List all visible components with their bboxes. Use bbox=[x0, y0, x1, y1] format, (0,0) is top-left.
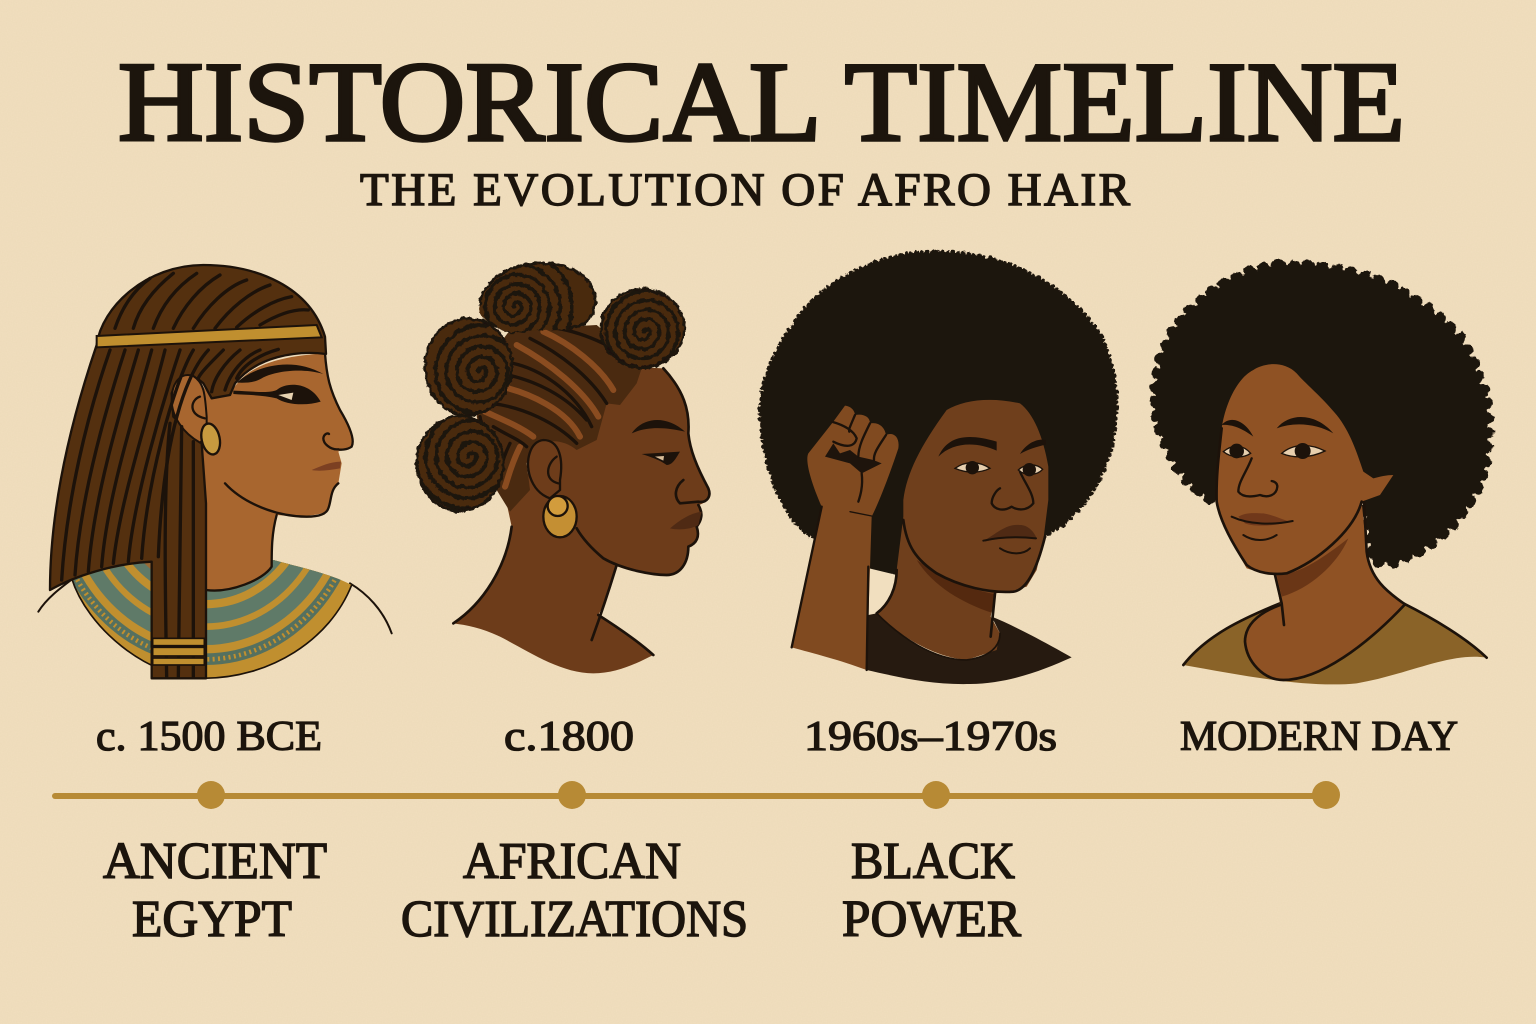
hoop earring bbox=[543, 496, 577, 537]
nose bbox=[1238, 458, 1277, 496]
era label: Black Power: POWER bbox=[842, 891, 1021, 948]
central hair mass bbox=[477, 325, 643, 512]
coiled bun top left bbox=[478, 261, 598, 334]
era label: African Civilizations: CIVILIZATIONS bbox=[401, 891, 748, 948]
background gap by neck bbox=[869, 568, 897, 615]
neck and face bbox=[877, 400, 1048, 660]
ear bbox=[528, 440, 561, 498]
figure: Ancient Egyptian woman with braided wig bbox=[38, 265, 392, 683]
subtitle: THE EVOLUTION OF AFRO HAIR bbox=[360, 164, 1131, 216]
eyebrows bbox=[1222, 417, 1333, 437]
era label: Black Power: BLACK bbox=[851, 833, 1015, 890]
timeline date: c. 1500 BCE: c. 1500 BCE bbox=[96, 714, 322, 760]
era label: Ancient Egypt: EGYPT bbox=[132, 891, 292, 948]
eyebrows bbox=[938, 437, 1046, 457]
wig bbox=[50, 265, 326, 678]
figure: Black Power woman with afro and raised fist bbox=[760, 252, 1117, 684]
neck and chest bbox=[1245, 502, 1405, 680]
era label: African Civilizations bbox=[401, 833, 748, 948]
cornrows bbox=[480, 328, 643, 487]
coiled bun middle left bbox=[422, 316, 514, 417]
era label: Black Power bbox=[842, 833, 1021, 948]
lips bbox=[1238, 513, 1290, 526]
era label: African Civilizations: AFRICAN bbox=[463, 833, 681, 890]
face bbox=[1217, 364, 1393, 573]
face and neck bbox=[172, 353, 353, 591]
olive top bbox=[1183, 603, 1487, 684]
figure: modern day woman with natural curls bbox=[1155, 265, 1488, 684]
timeline date: c.1800: c.1800 bbox=[504, 714, 634, 760]
black t-shirt bbox=[867, 613, 1072, 684]
title: HISTORICAL TIMELINE bbox=[118, 40, 1405, 165]
neck shadow bbox=[1277, 538, 1348, 597]
braid clasp bbox=[153, 638, 204, 665]
raised arm and fist bbox=[792, 406, 899, 670]
lips bbox=[312, 462, 341, 471]
lips bbox=[985, 525, 1037, 542]
earring bbox=[199, 422, 223, 456]
headband bbox=[97, 325, 322, 347]
ear bbox=[172, 375, 207, 443]
timeline axis with milestone dots bbox=[55, 781, 1340, 809]
timeline date: 1960s-1970s: 1960s–1970s bbox=[804, 714, 1057, 760]
fist details bbox=[825, 443, 882, 473]
braids bbox=[62, 273, 308, 677]
eyes bbox=[1223, 446, 1325, 457]
coiled bun lower left bbox=[414, 415, 506, 514]
neck shadow bbox=[917, 560, 995, 613]
era label: Ancient Egypt bbox=[103, 833, 327, 948]
neck and face bbox=[453, 367, 709, 673]
eyes bbox=[955, 463, 1043, 474]
shoulder lines bbox=[38, 578, 392, 633]
curly afro hair bbox=[1155, 265, 1488, 562]
figure: African civilizations woman with coiled buns and cornrows bbox=[415, 253, 709, 673]
eye and eyebrow bbox=[233, 364, 323, 404]
timeline date: Modern Day: MODERN DAY bbox=[1180, 714, 1458, 760]
afro hair bbox=[760, 252, 1117, 573]
coiled bun top right bbox=[600, 287, 687, 370]
eye and brow bbox=[632, 420, 685, 465]
lips bbox=[670, 512, 702, 529]
era label: Ancient Egypt: ANCIENT bbox=[103, 833, 327, 890]
broad collar necklace bbox=[73, 560, 352, 678]
nose bbox=[992, 472, 1033, 510]
